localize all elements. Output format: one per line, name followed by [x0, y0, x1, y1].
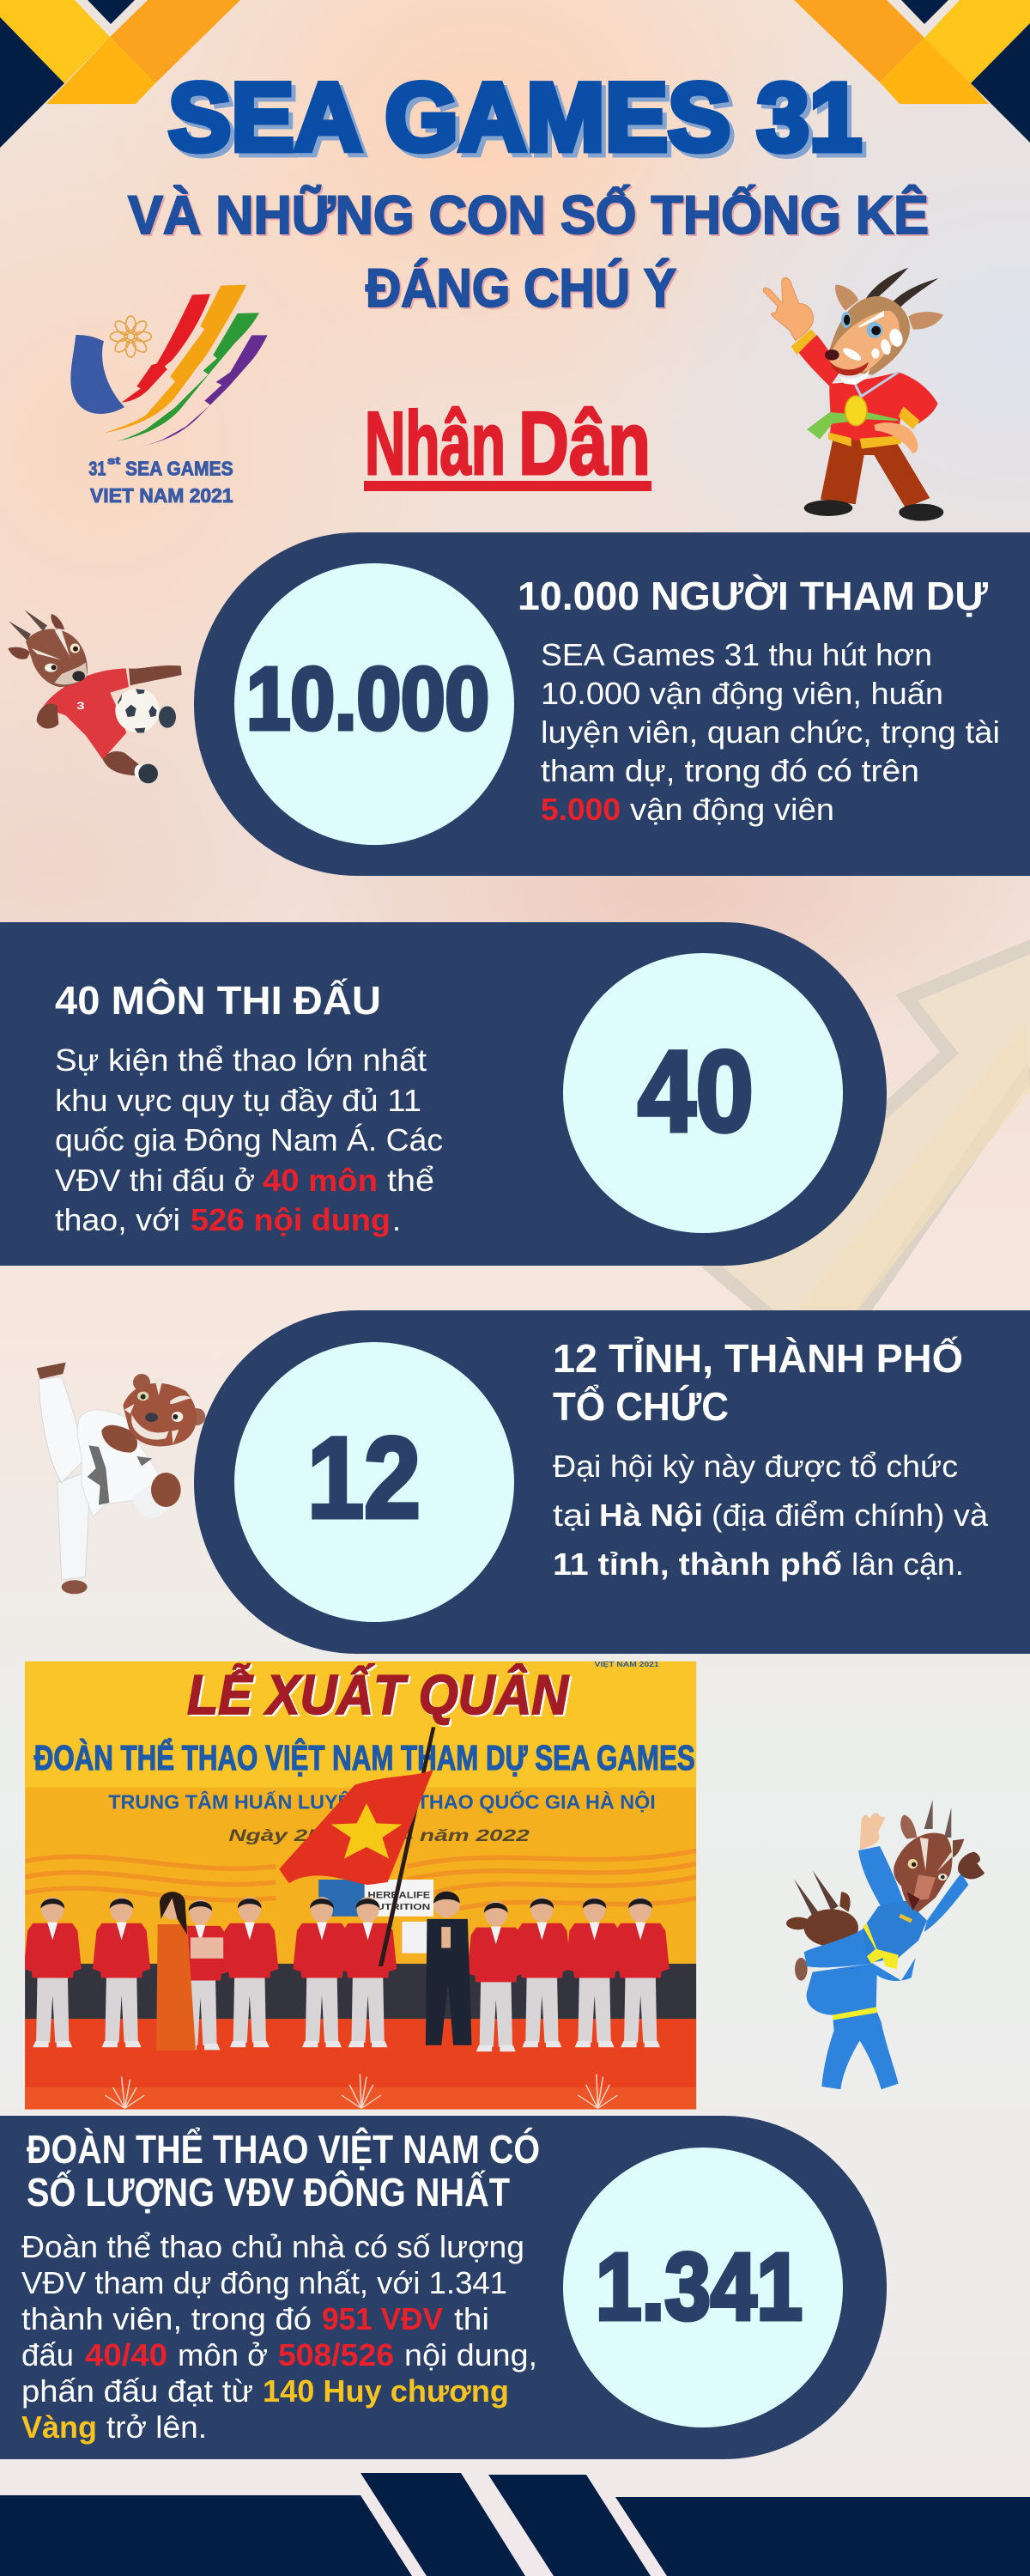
- number circle: 12: [234, 1342, 514, 1622]
- body text: Đoàn thể thao chủ nhà có số lượng: [21, 2229, 524, 2264]
- logo: Nhan Dan: Nhân: [365, 394, 506, 494]
- heading: [553, 1336, 963, 1429]
- body text: SEA Games 31 thu hút hơn: [541, 637, 932, 672]
- body text: 526 nội dung: [191, 1202, 391, 1237]
- heading: 12 TỈNH, THÀNH PHỐ: [553, 1336, 963, 1381]
- body text: phấn đấu đạt từ: [21, 2373, 253, 2409]
- logo: Nhan Dan: Dân: [518, 394, 651, 494]
- number circle: 40: [563, 953, 843, 1233]
- body text: [55, 1042, 443, 1237]
- logo: 31st SEA Games: 31: [88, 457, 106, 479]
- photo: send-off ceremony: HERBALIFE: [368, 1890, 430, 1900]
- corner decoration: top left: [0, 0, 240, 148]
- number circle: 1.341: [563, 2148, 843, 2427]
- mascot: blue judo throw: [786, 1800, 985, 2089]
- logo: 31st SEA Games: st: [107, 455, 120, 467]
- panel: 12 host provinces: [194, 1310, 1030, 1654]
- body text: 40/40: [85, 2337, 167, 2372]
- body text: [541, 637, 1000, 827]
- body text: môn ở: [178, 2337, 268, 2372]
- body text: nội dung,: [404, 2337, 537, 2372]
- title: SEA GAMES 31: [168, 64, 862, 171]
- body text: luyện viên, quan chức, trọng tài: [541, 714, 1000, 750]
- heading: TỔ CHỨC: [553, 1384, 729, 1429]
- heading: SỐ LƯỢNG VĐV ĐÔNG NHẤT: [27, 2170, 510, 2215]
- body text: quốc gia Đông Nam Á. Các: [55, 1122, 443, 1157]
- subtitle: ĐÁNG CHÚ Ý: [366, 258, 676, 319]
- body text: 40 môn: [263, 1163, 378, 1198]
- panel: Vietnam delegation 1.341: [0, 2116, 887, 2459]
- background arrow: [712, 929, 1030, 1318]
- body text: (địa điểm chính) và: [712, 1498, 989, 1533]
- mascot: goat in red shirt: [763, 268, 943, 521]
- logo: 31st SEA Games: [70, 285, 268, 507]
- body text: 508/526: [278, 2337, 394, 2372]
- number circle: 40: 40: [638, 1028, 754, 1156]
- number circle: 10.000: 10.000: [246, 649, 489, 748]
- logo: 31st SEA Games: SEA GAMES: [125, 457, 233, 479]
- body text: lân cận.: [851, 1546, 964, 1582]
- body text: .: [392, 1202, 401, 1237]
- body text: khu vực quy tụ đầy đủ 11: [55, 1083, 421, 1118]
- body text: 951 VĐV: [322, 2301, 443, 2336]
- body text: 140 Huy chương: [263, 2373, 509, 2409]
- body text: Hà Nội: [599, 1498, 703, 1533]
- body text: 5.000: [541, 792, 621, 827]
- body text: thi: [454, 2301, 489, 2336]
- body text: thể: [387, 1163, 434, 1198]
- photo: send-off ceremony: Ngày 25 tháng 4 năm 2022: [228, 1826, 530, 1845]
- photo: send-off ceremony: LỄ XUẤT QUÂN: [187, 1663, 570, 1726]
- body text: VĐV tham dự đông nhất, với 1.341: [21, 2265, 507, 2300]
- body text: Vàng: [21, 2409, 97, 2445]
- subtitle: [128, 185, 929, 319]
- number circle: 1.341: 1.341: [596, 2234, 803, 2340]
- heading: 10.000 NGƯỜI THAM DỰ: [518, 574, 989, 618]
- body text: Đại hội kỳ này được tổ chức: [553, 1449, 958, 1484]
- panel: 10.000 participants: [194, 532, 1030, 876]
- footer bar with stripes: [0, 2473, 1030, 2576]
- body text: thành viên, trong đó: [21, 2301, 312, 2336]
- logo: 31st SEA Games: VIET NAM 2021: [90, 484, 233, 507]
- body text: tại: [553, 1498, 591, 1533]
- mascot: goat playing soccer: [8, 610, 182, 783]
- photo: send-off ceremony: [24, 1660, 696, 2110]
- body text: thao, với: [55, 1202, 180, 1237]
- heading: 40 MÔN THI ĐẤU: [55, 978, 381, 1023]
- photo: send-off ceremony: NUTRITION: [368, 1903, 430, 1912]
- body text: 10.000 vận động viên, huấn: [541, 676, 943, 711]
- mascot: karate in white: [37, 1363, 205, 1594]
- heading: [27, 2127, 540, 2215]
- panel: 40 sports: [0, 922, 887, 1266]
- body text: Sự kiện thể thao lớn nhất: [55, 1042, 427, 1078]
- subtitle: VÀ NHỮNG CON SỐ THỐNG KÊ: [128, 185, 929, 246]
- photo: send-off ceremony: VIỆT NAM 2021: [595, 1660, 659, 1669]
- number circle: 10.000: [234, 563, 514, 845]
- body text: [21, 2229, 537, 2445]
- corner decoration: top right: [794, 0, 1030, 143]
- body text: vận động viên: [630, 792, 834, 827]
- body text: 11 tỉnh, thành phố: [553, 1546, 842, 1582]
- body text: VĐV thi đấu ở: [55, 1163, 255, 1198]
- photo: send-off ceremony: TRUNG TÂM HUẤN LUYỆN THỂ THAO QUỐC GIA HÀ NỘI: [108, 1790, 656, 1814]
- body text: trở lên.: [106, 2409, 207, 2445]
- mascot: goat playing soccer: 3: [76, 700, 85, 712]
- number circle: 12: 12: [307, 1414, 421, 1542]
- body text: tham dự, trong đó có trên: [541, 753, 919, 788]
- body text: [553, 1449, 989, 1582]
- body text: đấu: [21, 2337, 74, 2372]
- heading: ĐOÀN THỂ THAO VIỆT NAM CÓ: [27, 2127, 540, 2172]
